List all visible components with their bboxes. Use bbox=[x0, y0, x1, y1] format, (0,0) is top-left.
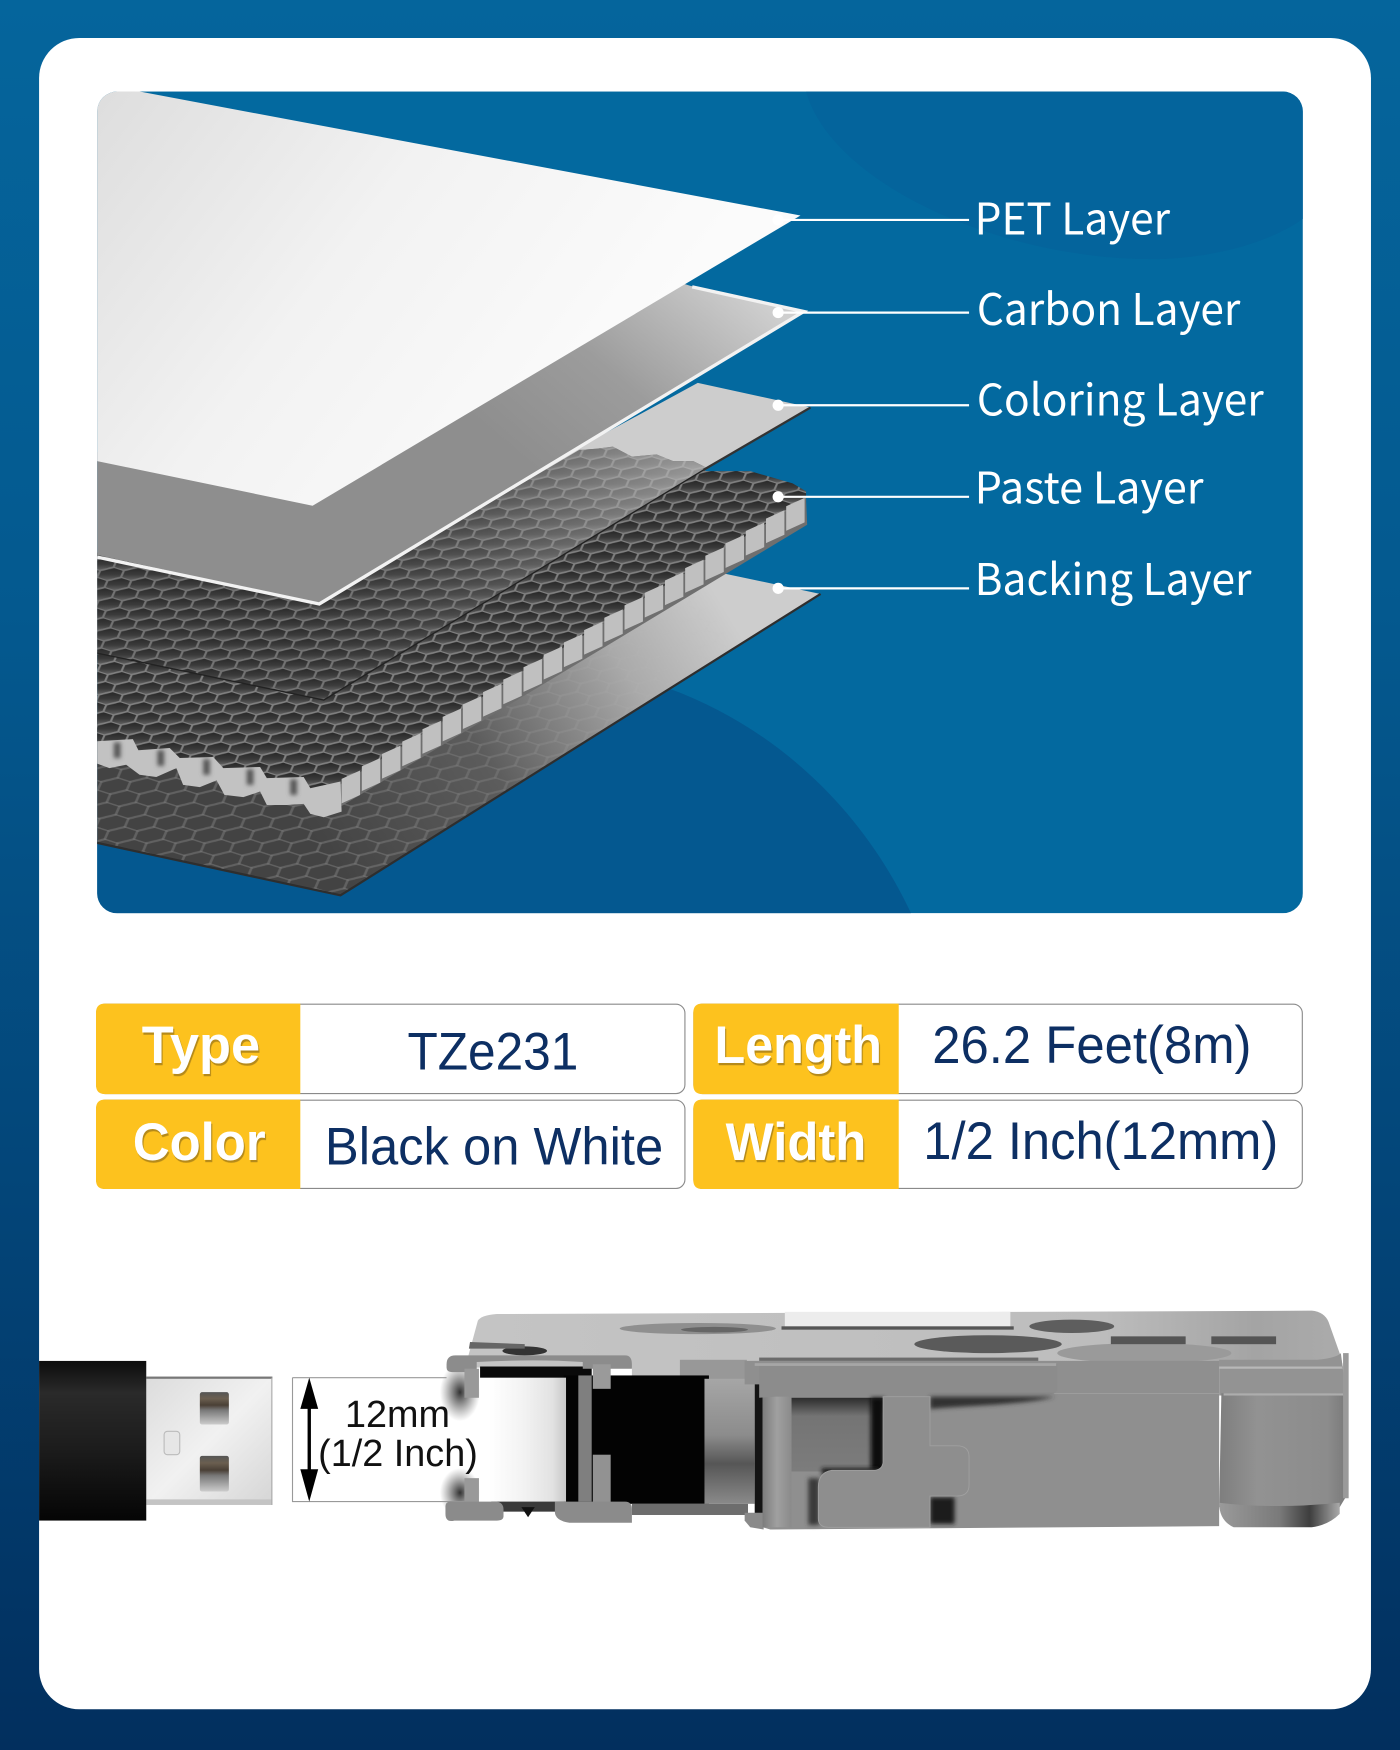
panel: tape layer diagram bbox=[97, 92, 1303, 913]
panel background bbox=[97, 92, 1303, 913]
layer: carbon bbox=[97, 279, 804, 604]
tape cartridge bbox=[293, 1311, 1349, 1530]
cartridge right roller bbox=[1219, 1353, 1349, 1527]
layer: backing bbox=[97, 558, 834, 904]
cartridge top plate bbox=[467, 1311, 1343, 1380]
row: Type: Type bbox=[142, 1017, 260, 1075]
row: Length bbox=[693, 1004, 1302, 1094]
cartridge clips bbox=[445, 1355, 632, 1523]
row: Width: Width bbox=[726, 1114, 866, 1172]
honeycomb front edge, right bbox=[339, 498, 807, 806]
row: Color: Black on White bbox=[325, 1118, 663, 1176]
USB metal connector bbox=[146, 1377, 272, 1505]
layer: PET bbox=[97, 92, 800, 506]
icon: USB plug bbox=[39, 1361, 272, 1521]
honeycomb front edge, left bbox=[97, 739, 342, 817]
white tape with dimension bbox=[293, 1363, 566, 1517]
dimension text: 12mm bbox=[345, 1394, 450, 1436]
label: Backing Layer: Backing Layer bbox=[975, 544, 1252, 608]
double arrow: tape width bbox=[300, 1378, 318, 1502]
row: Type: TZe231 bbox=[407, 1024, 578, 1082]
leader lines and dots bbox=[773, 214, 969, 594]
row: Color: Color bbox=[133, 1114, 266, 1172]
row: Length: 26.2 Feet(8m) bbox=[932, 1017, 1252, 1075]
L-shaped latch bbox=[818, 1397, 969, 1527]
layer: coloring bbox=[97, 383, 811, 700]
label: Paste Layer: Paste Layer bbox=[975, 453, 1204, 517]
black ribbon gap bbox=[480, 1367, 592, 1380]
row: Length: Length bbox=[715, 1017, 882, 1075]
row: Width bbox=[693, 1100, 1302, 1189]
layer: paste honeycomb lower bbox=[97, 470, 807, 817]
cartridge main body bbox=[745, 1361, 1219, 1530]
label: Coloring Layer: Coloring Layer bbox=[977, 364, 1264, 428]
label: Carbon Layer: Carbon Layer bbox=[977, 274, 1240, 338]
white tape with dimension: (1/2 Inch) bbox=[318, 1433, 478, 1475]
label: PET Layer: PET Layer bbox=[975, 183, 1170, 247]
row: Color bbox=[96, 1100, 685, 1189]
row: Type bbox=[96, 1004, 685, 1094]
spec table bbox=[96, 1004, 1302, 1189]
row: Width: 1/2 Inch(12mm) bbox=[923, 1113, 1278, 1171]
USB black cap bbox=[39, 1361, 146, 1521]
